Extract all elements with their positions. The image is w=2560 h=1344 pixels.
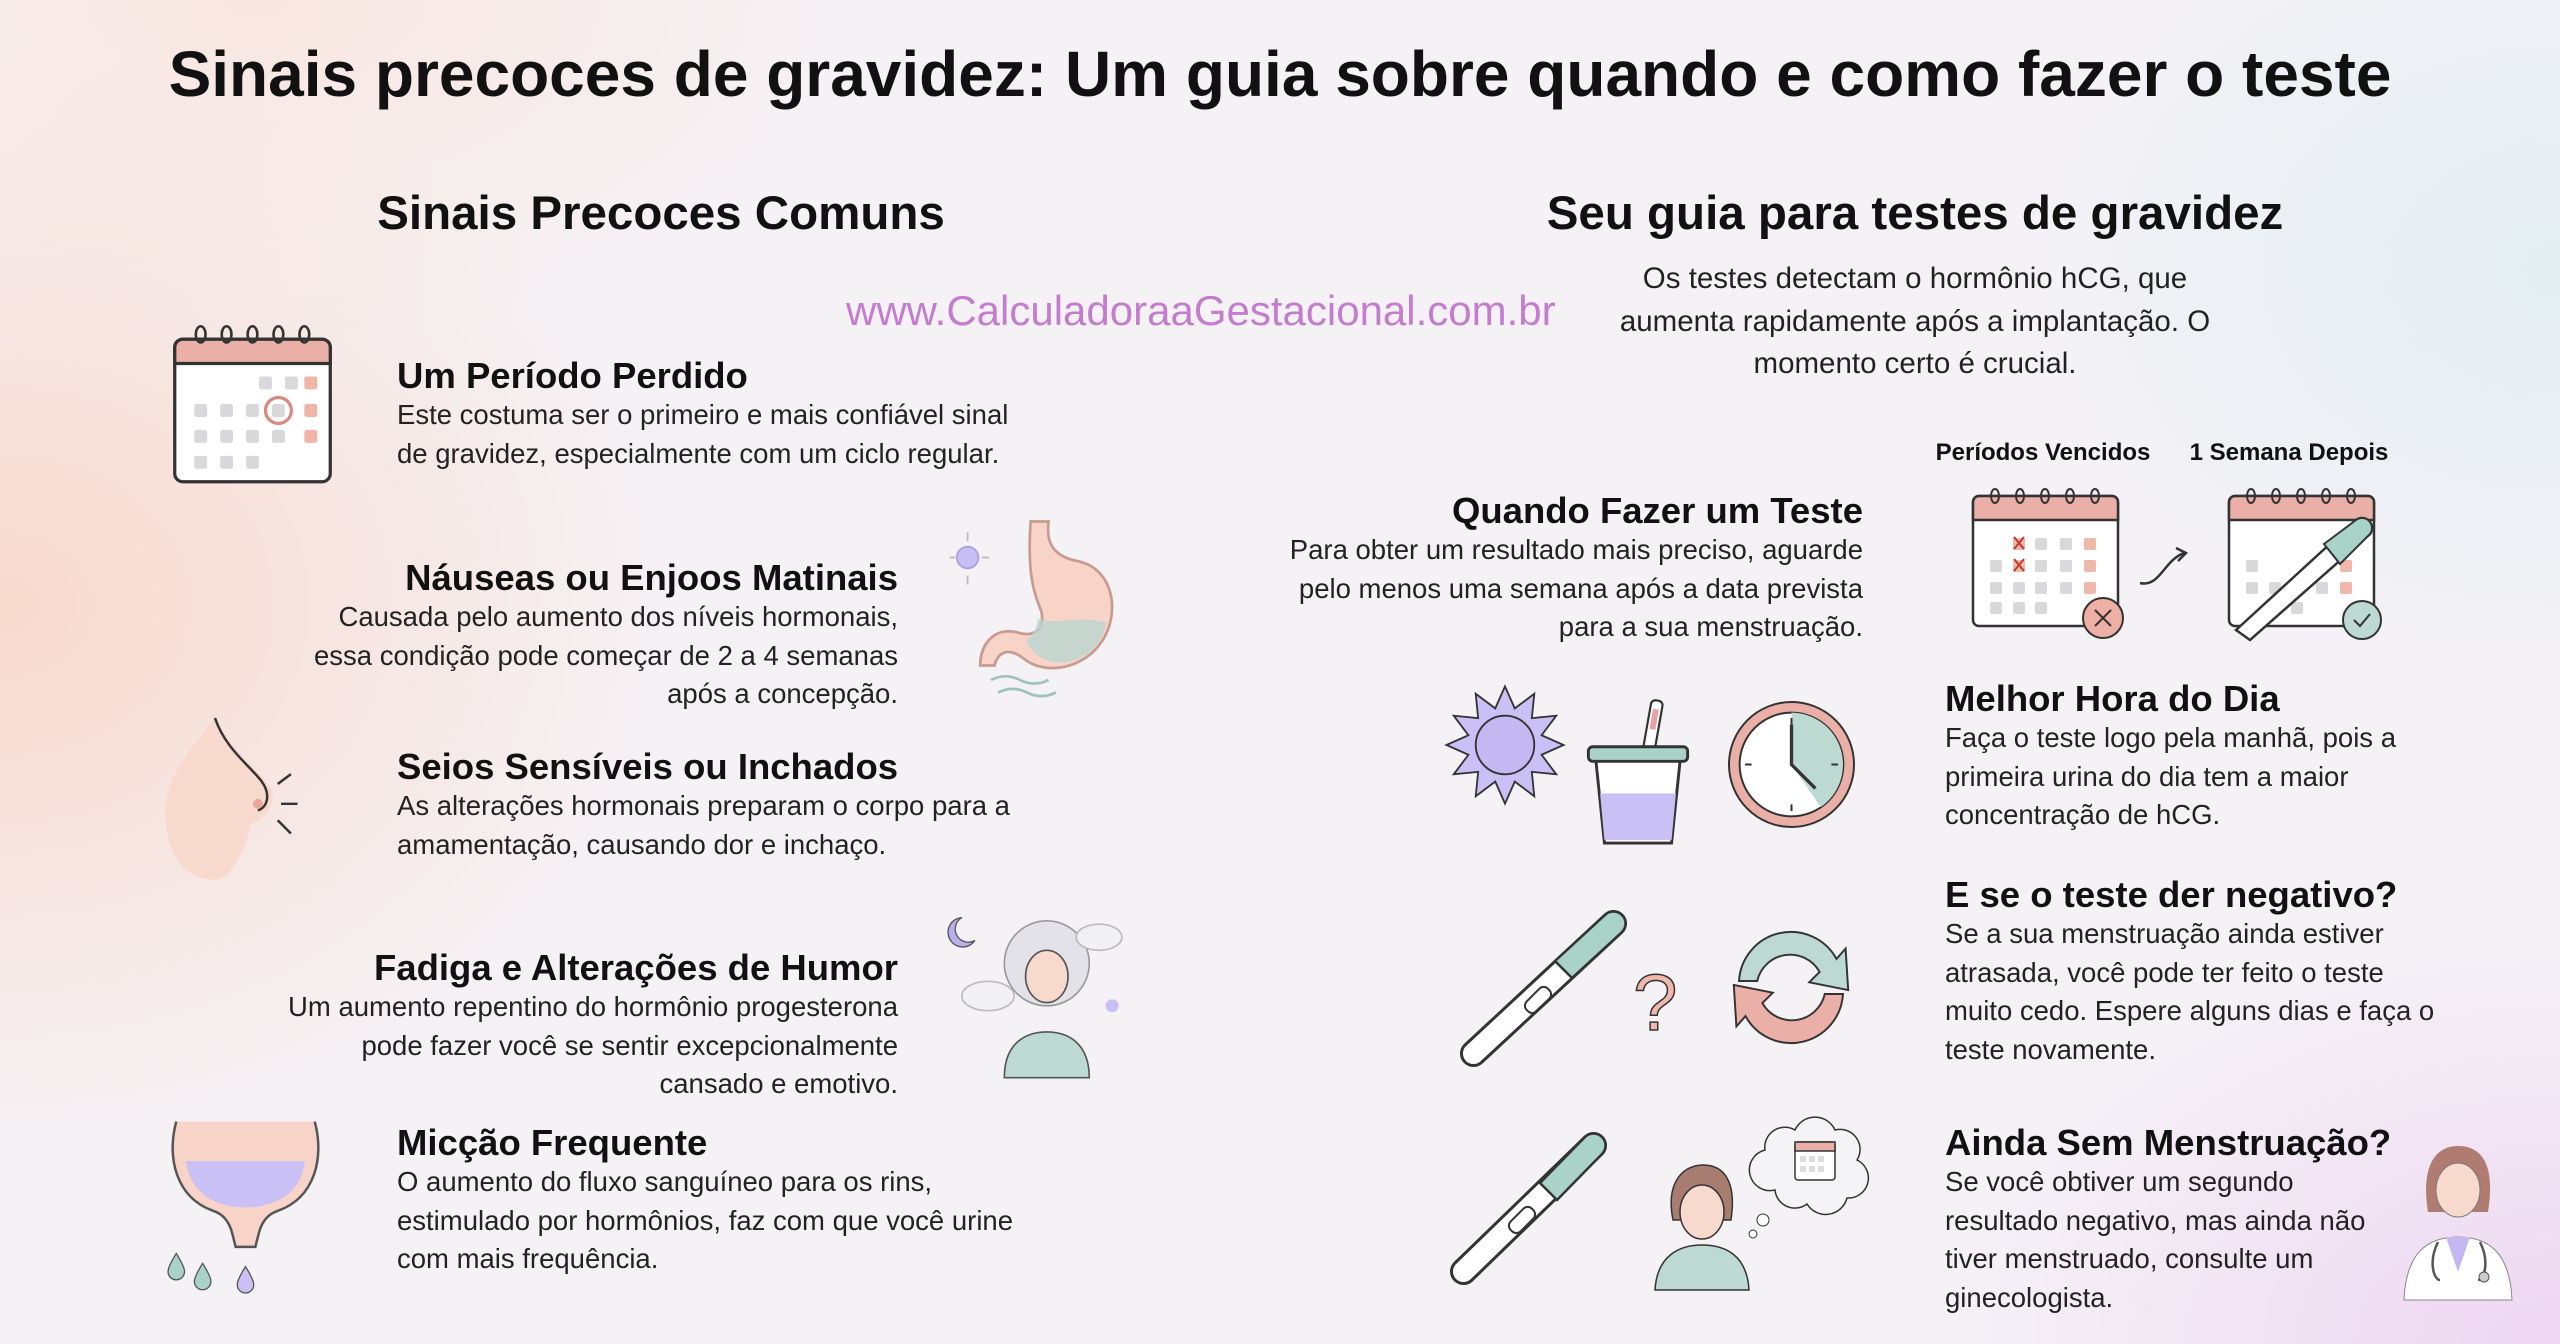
icon: calendar missed period (173, 325, 332, 484)
text: Melhor Hora do Dia: primeira urina do dia tem a maior (1945, 760, 2349, 792)
text: Fadiga: cansado e emotivo. (660, 1068, 898, 1099)
icon: cycle arrows (1732, 930, 1850, 1044)
text: Náuseas: essa condição pode começar de 2 a 4 semanas (314, 640, 898, 670)
text: Seios: Seios Sensíveis ou Inchados (397, 746, 898, 787)
text: Fadiga (288, 947, 898, 1099)
text: Ainda Sem Menstruação?: tiver menstruado, consulte um (1945, 1243, 2313, 1274)
text: Quando Fazer um Teste: Para obter um resultado mais preciso, aguarde (1290, 534, 1863, 565)
heading: Seu guia para testes de gravidez: Seu guia para testes de gravidez (1547, 187, 2283, 240)
icon: doctor (2404, 1146, 2512, 1300)
label: Períodos Vencidos: Períodos Vencidos (1936, 439, 2150, 466)
text: Fadiga: pode fazer você se sentir excepcionalmente (361, 1030, 898, 1060)
icon: test stick 2 (1450, 1132, 1607, 1285)
text: Náuseas: Causada pelo aumento dos níveis hormonais, (338, 601, 898, 632)
text: Náuseas: após a concepção. (667, 678, 898, 709)
intro text (1620, 262, 2210, 380)
text: Um Período Perdido: Este costuma ser o primeiro e mais confiável sinal (397, 399, 1008, 430)
text: E se o teste der negativo?: E se o teste der negativo? (1945, 874, 2397, 915)
text: Ainda Sem Menstruação? (1945, 1122, 2391, 1313)
text: Melhor Hora do Dia: Faça o teste logo pela manhã, pois a (1945, 722, 2396, 753)
intro text: aumenta rapidamente após a implantação. O (1620, 304, 2210, 338)
icon: test stick with question (1460, 910, 1678, 1067)
icon: clock (1728, 701, 1855, 828)
watermark: www.CalculadoraaGestacional.com.br (846, 287, 1556, 334)
text: Náuseas (314, 557, 898, 709)
text: E se o teste der negativo?: Se a sua menstruação ainda estiver (1945, 918, 2384, 949)
icon: test stick with question: ? (1633, 958, 1678, 1047)
icon: breast (166, 718, 298, 880)
text: Um Período Perdido: Um Período Perdido (397, 355, 748, 396)
text: Melhor Hora do Dia: Melhor Hora do Dia (1945, 678, 2280, 719)
text: Náuseas: Náuseas ou Enjoos Matinais (405, 557, 898, 598)
intro text: momento certo é crucial. (1754, 347, 2076, 380)
icon: bladder (167, 1121, 320, 1294)
text: Melhor Hora do Dia: concentração de hCG. (1945, 799, 2220, 830)
text: Seios (397, 746, 1010, 860)
text: Micção (397, 1122, 1013, 1274)
text: Micção: estimulado por hormônios, faz com que você urine (397, 1204, 1013, 1236)
icon: stomach (950, 520, 1114, 698)
icon: tired woman (947, 917, 1123, 1078)
text: Fadiga: Um aumento repentino do hormônio progesterona (288, 991, 898, 1022)
text: E se o teste der negativo?: teste novamente. (1945, 1034, 2156, 1064)
icon: calendars with arrow (1972, 488, 2382, 642)
text: Um Período Perdido: de gravidez, especialmente com um ciclo regular. (397, 438, 999, 468)
intro text: Os testes detectam o hormônio hCG, que (1643, 262, 2187, 295)
text: E se o teste der negativo?: atrasada, você pode ter feito o teste (1945, 956, 2384, 988)
text: Micção: Micção Frequente (397, 1122, 707, 1163)
title: Sinais precoces de gravidez: Um guia sobre quando e como fazer o teste (169, 38, 2391, 110)
text: Ainda Sem Menstruação?: resultado negativo, mas ainda não (1945, 1204, 2365, 1236)
icon: sun (1444, 684, 1566, 806)
text: Fadiga: Fadiga e Alterações de Humor (374, 947, 898, 988)
icon: urine cup (1586, 699, 1690, 844)
text: Quando Fazer um Teste: para a sua menstruação. (1559, 611, 1863, 642)
text: Melhor Hora do Dia (1945, 678, 2396, 830)
text: Quando Fazer um Teste (1290, 490, 1864, 642)
text: Ainda Sem Menstruação?: Se você obtiver um segundo (1945, 1166, 2294, 1197)
label: 1 Semana Depois: 1 Semana Depois (2190, 439, 2388, 466)
text: Um Período Perdido (397, 355, 1008, 469)
text: Quando Fazer um Teste: pelo menos uma semana após a data prevista (1299, 572, 1863, 604)
text: E se o teste der negativo? (1945, 874, 2434, 1064)
text: Ainda Sem Menstruação?: Ainda Sem Menstruação? (1945, 1122, 2391, 1163)
text: Micção: com mais frequência. (397, 1243, 658, 1274)
text: E se o teste der negativo?: muito cedo. Espere alguns dias e faça o (1945, 995, 2434, 1026)
text: Ainda Sem Menstruação?: ginecologista. (1945, 1282, 2113, 1312)
text: Micção: O aumento do fluxo sanguíneo para os rins, (397, 1166, 932, 1197)
icon: woman thinking of calendar (1654, 1116, 1870, 1291)
text: Seios: As alterações hormonais preparam o corpo para a (397, 790, 1010, 821)
heading: Sinais Precoces Comuns: Sinais Precoces Comuns (377, 187, 945, 240)
text: Quando Fazer um Teste: Quando Fazer um Teste (1452, 490, 1863, 531)
text: Seios: amamentação, causando dor e inchaço. (397, 828, 886, 860)
